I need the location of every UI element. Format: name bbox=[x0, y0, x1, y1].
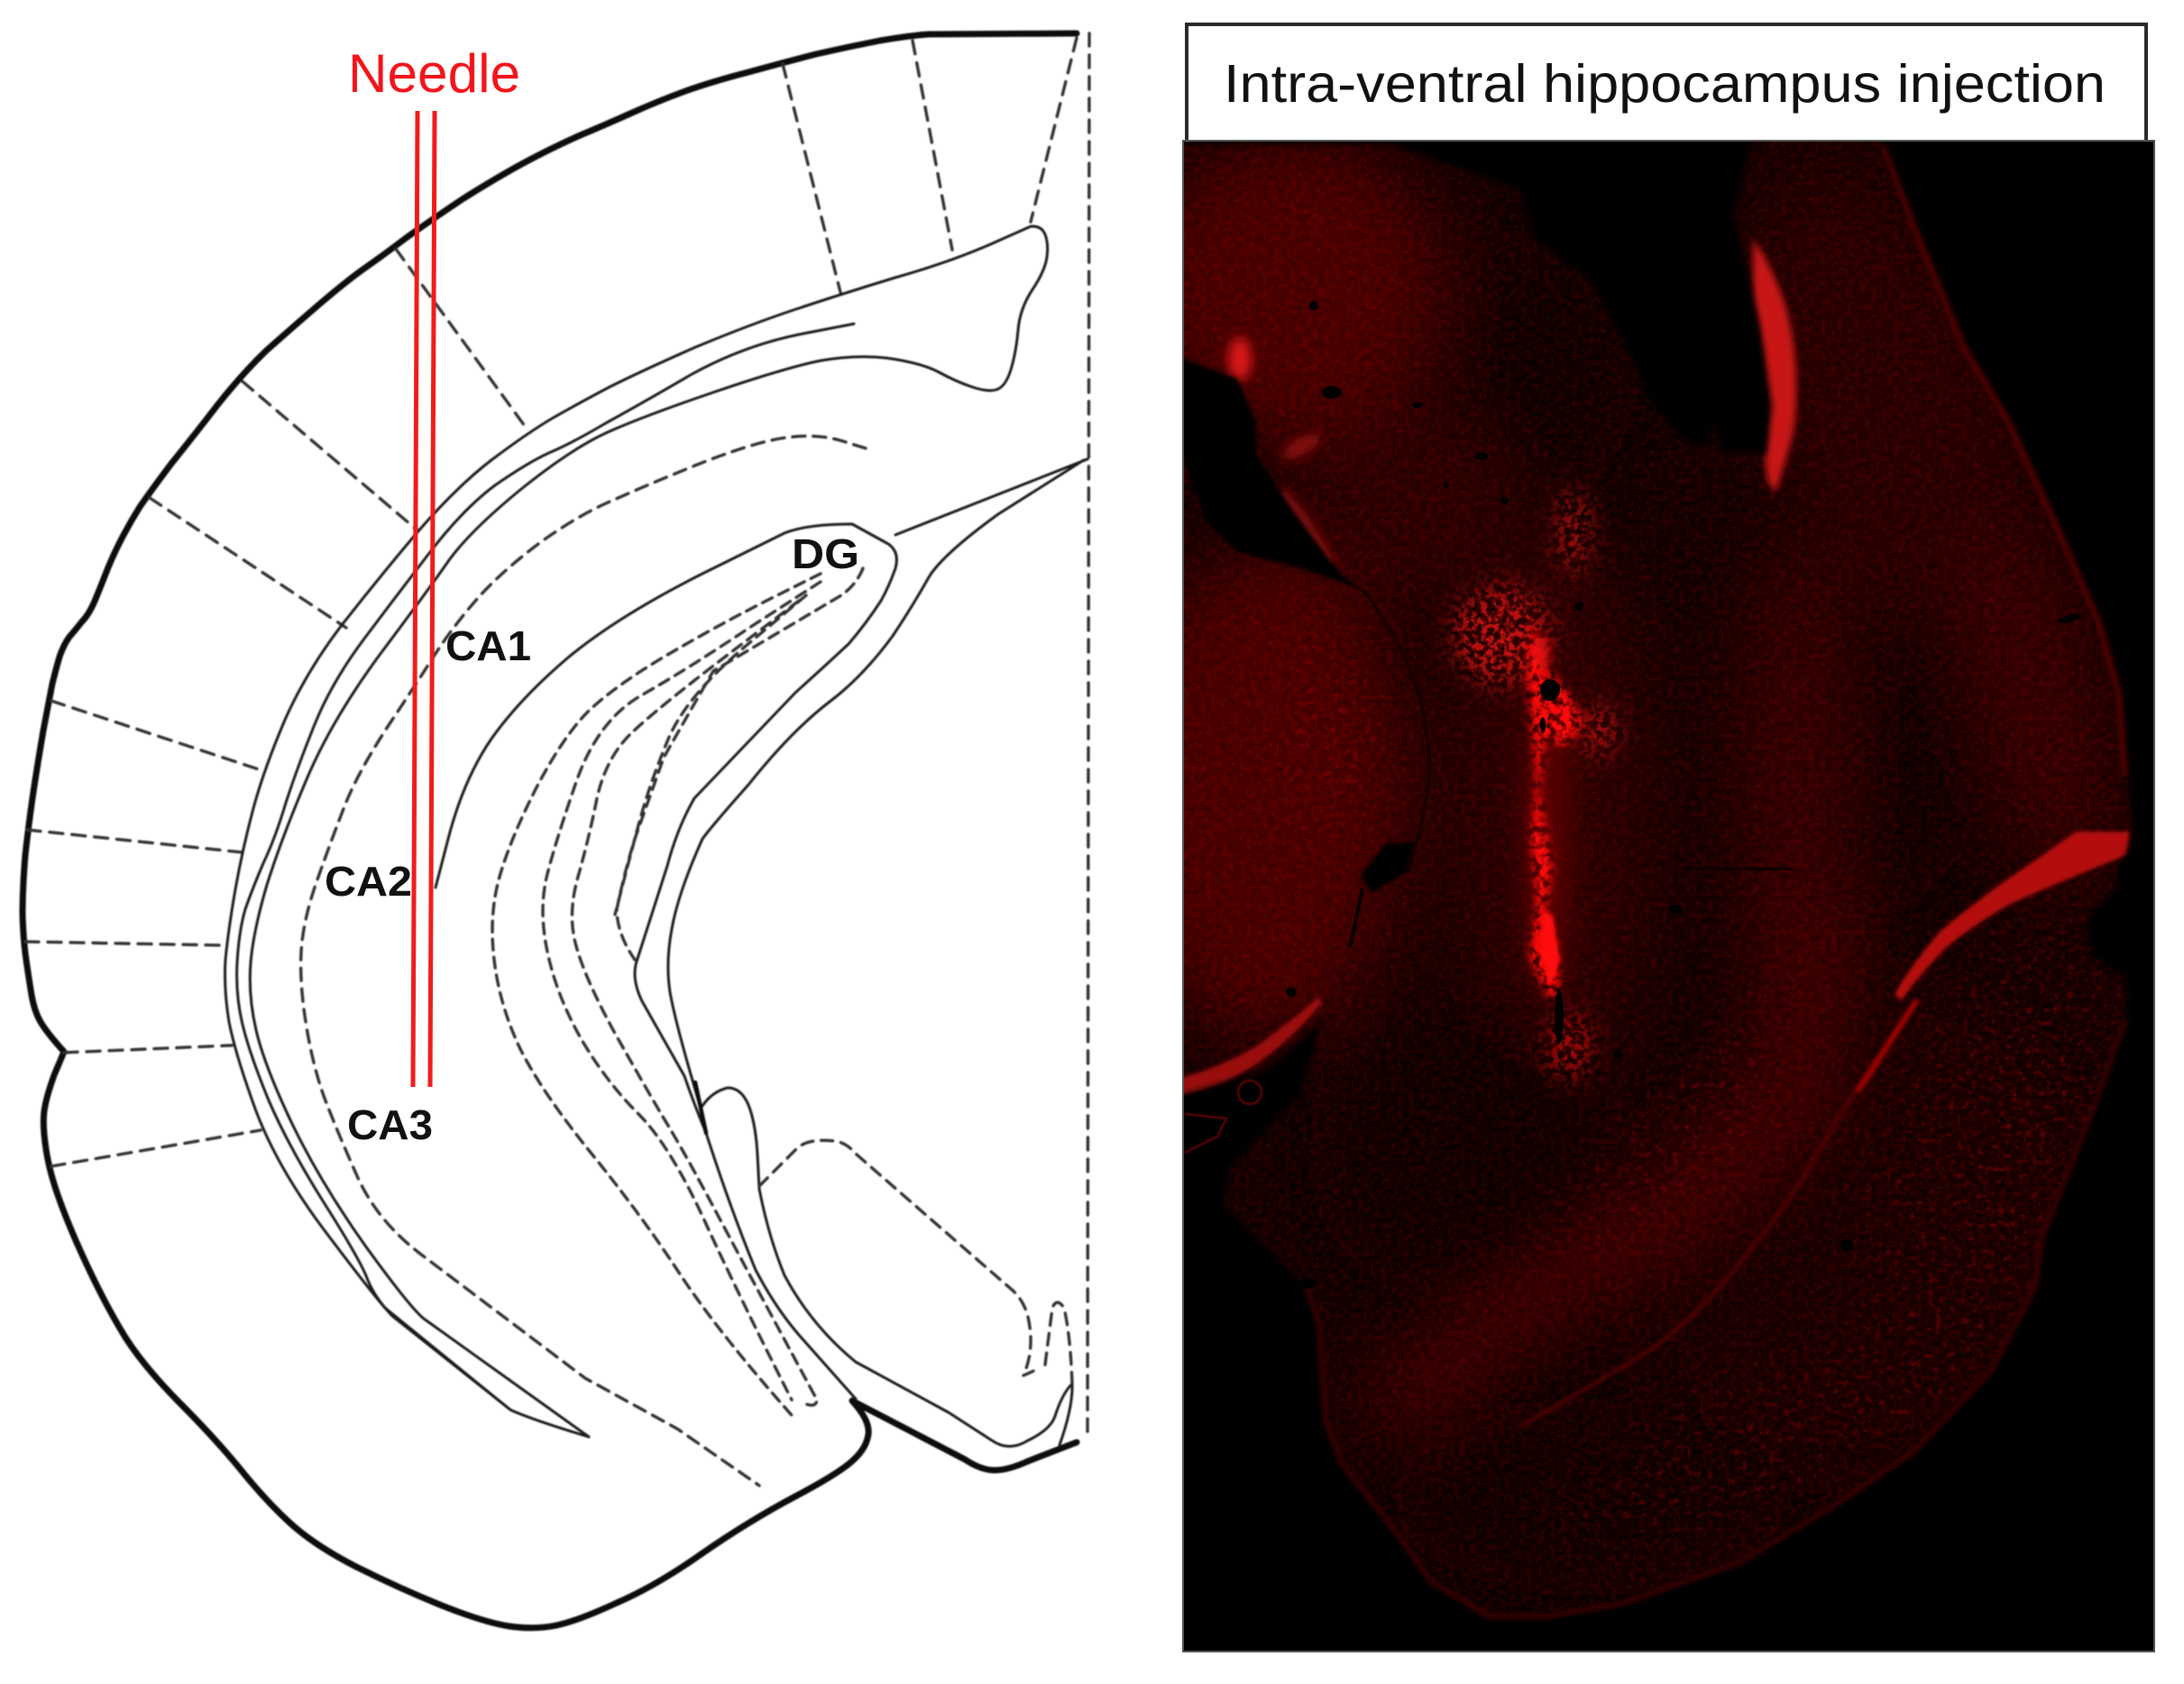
dark mottling bbox=[1182, 140, 2155, 1652]
panel: brain atlas diagram bbox=[23, 33, 1089, 1628]
dashed nucleus outline bbox=[759, 1140, 1072, 1384]
dashed CA field boundary bbox=[301, 436, 866, 1486]
bright lower right band bbox=[1895, 832, 2130, 1000]
black background bbox=[1182, 140, 2155, 1652]
title text: Intra-ventral hippocampus injection bbox=[1224, 54, 2106, 114]
lower left arc bbox=[1177, 997, 1322, 1097]
dentate gyrus dashed layers bbox=[492, 568, 863, 1415]
vascular holes bbox=[1286, 301, 2082, 1289]
hippocampal diffuse band bbox=[1385, 893, 1824, 1421]
label: CA1: CA1 bbox=[445, 622, 531, 669]
cortex outer outline bbox=[23, 33, 1077, 1628]
label: DG: DG bbox=[792, 530, 859, 577]
bright upper band bbox=[1753, 238, 1796, 492]
thick tract segment bbox=[695, 1082, 706, 1133]
label: CA2: CA2 bbox=[325, 858, 412, 905]
needle injection track glow bbox=[1452, 487, 1616, 1082]
label: CA3: CA3 bbox=[347, 1101, 433, 1148]
label: Needle: Needle bbox=[348, 43, 520, 104]
black ventricle gaps bbox=[1172, 354, 1414, 947]
thin arc continuation bbox=[1520, 1000, 1917, 1426]
brain tissue section bbox=[1184, 142, 2135, 1622]
regional fluorescence intensity bbox=[1184, 142, 2130, 1600]
panel: fluorescence micrograph bbox=[1118, 130, 2171, 1660]
meningeal fragments bbox=[1185, 1081, 1262, 1153]
panel border bbox=[1183, 141, 2154, 1652]
bright left features bbox=[1228, 337, 1330, 564]
scattered bright cells bbox=[1243, 601, 2124, 1580]
white matter tract and ventricular horn bbox=[225, 226, 1048, 1437]
pyramidal layer solid outlines bbox=[436, 459, 1087, 1447]
blob boundary line bbox=[1363, 590, 1429, 871]
tissue edge glow bbox=[1305, 1022, 2127, 1618]
needle tract bbox=[413, 111, 435, 1087]
panel: title box bbox=[1187, 24, 2146, 142]
midline dashed boundary bbox=[1087, 33, 1089, 1440]
speckle texture bbox=[1182, 140, 2155, 1652]
cortical area dashed dividers bbox=[25, 38, 1077, 1166]
